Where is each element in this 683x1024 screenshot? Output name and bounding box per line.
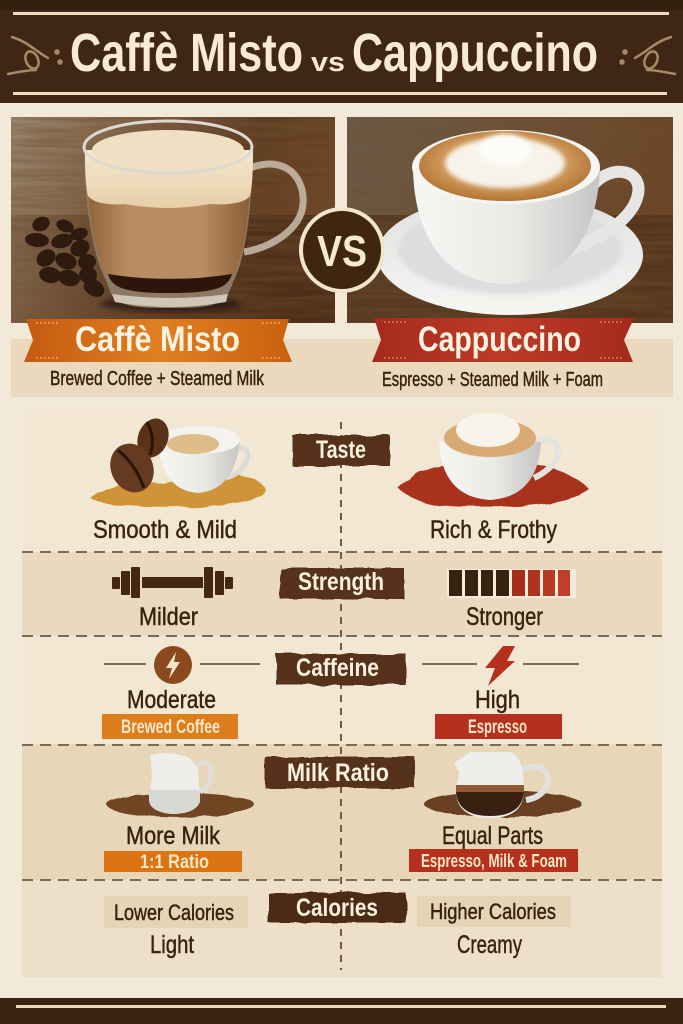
icon: frothy cup xyxy=(439,413,558,500)
tag: espresso xyxy=(435,714,562,739)
label: calories: Calories xyxy=(296,894,378,922)
tag: higher calories: Higher Calories xyxy=(430,899,556,924)
icon: milk jug xyxy=(149,753,211,814)
title: Cappuccino xyxy=(352,23,598,83)
text: cappuccino ingredients: Espresso + Steamed Milk + Foam xyxy=(382,369,603,391)
header flourish left xyxy=(8,37,62,74)
label: milk ratio: Milk Ratio xyxy=(287,759,389,787)
row: taste xyxy=(90,413,590,544)
text: more milk: More Milk xyxy=(126,822,220,850)
footer bar xyxy=(0,998,683,1024)
label: taste: Taste xyxy=(316,436,366,464)
icon: coffee beans xyxy=(102,414,174,500)
icon: ground coffee right xyxy=(424,791,582,817)
icon: mild cup xyxy=(158,426,248,493)
row: calories xyxy=(104,893,571,959)
ribbon: caffe misto: Caffè Misto xyxy=(75,320,240,359)
label: strength: Strength xyxy=(298,568,384,596)
tag: espresso: Espresso xyxy=(468,717,527,738)
vs badge: VS xyxy=(317,227,367,276)
label: caffeine xyxy=(276,654,406,685)
text: stronger: Stronger xyxy=(466,603,543,631)
vs badge xyxy=(299,207,385,293)
tag: lower calories xyxy=(104,896,248,928)
tag: higher calories xyxy=(417,896,571,927)
text: milder: Milder xyxy=(139,603,198,631)
ribbon: cappuccino xyxy=(372,318,634,362)
tag: 1:1 ratio xyxy=(104,851,242,873)
panel: caffe misto photo xyxy=(11,117,335,323)
tag: lower calories: Lower Calories xyxy=(114,900,234,925)
icon: smear red xyxy=(398,464,590,507)
icon: red bolt xyxy=(485,646,515,686)
label: taste xyxy=(292,435,390,466)
text: high: High xyxy=(475,686,520,714)
text: equal parts: Equal Parts xyxy=(442,822,543,850)
tag: brewed coffee xyxy=(102,714,238,739)
row: strength xyxy=(112,567,576,631)
text: moderate: Moderate xyxy=(127,686,216,714)
icon: dumbbell xyxy=(112,567,233,598)
icon: smear orange xyxy=(90,474,265,507)
text: creamy: Creamy xyxy=(457,931,522,959)
row: milk ratio xyxy=(104,752,582,873)
icon: saucer xyxy=(377,195,643,315)
text: smooth and mild: Smooth & Mild xyxy=(93,516,237,544)
icon: coffee beans pile xyxy=(24,214,108,300)
header banner xyxy=(0,0,683,103)
icon: layered jug xyxy=(454,752,548,818)
tag: 1:1 ratio: 1:1 Ratio xyxy=(140,852,209,873)
icon: ground coffee left xyxy=(107,793,255,817)
ribbon: caffe misto xyxy=(24,319,292,362)
title xyxy=(70,23,598,83)
tag: espresso milk foam: Espresso, Milk & Foam xyxy=(421,851,567,871)
subtitle strip behind product labels xyxy=(11,339,673,397)
icon: strength meter xyxy=(447,569,576,598)
label: calories xyxy=(268,893,406,923)
title: vs xyxy=(311,47,345,77)
panel: comparison table xyxy=(22,409,662,977)
panel: cappuccino photo xyxy=(347,117,673,323)
ribbon: cappuccino: Cappuccino xyxy=(418,320,581,359)
icon: glass mug xyxy=(84,121,303,312)
tag: espresso milk foam xyxy=(409,849,578,872)
row: caffeine xyxy=(102,646,579,739)
icon: cappuccino cup xyxy=(412,130,638,284)
tag: brewed coffee: Brewed Coffee xyxy=(121,717,220,738)
text: misto ingredients: Brewed Coffee + Steamed Milk xyxy=(50,368,265,390)
header flourish right xyxy=(620,37,675,74)
icon: bean with bolt xyxy=(154,646,192,684)
text: rich and frothy: Rich & Frothy xyxy=(430,516,557,544)
label: caffeine: Caffeine xyxy=(296,654,379,682)
title: Caffè Misto xyxy=(70,23,303,83)
text: light: Light xyxy=(150,931,194,959)
